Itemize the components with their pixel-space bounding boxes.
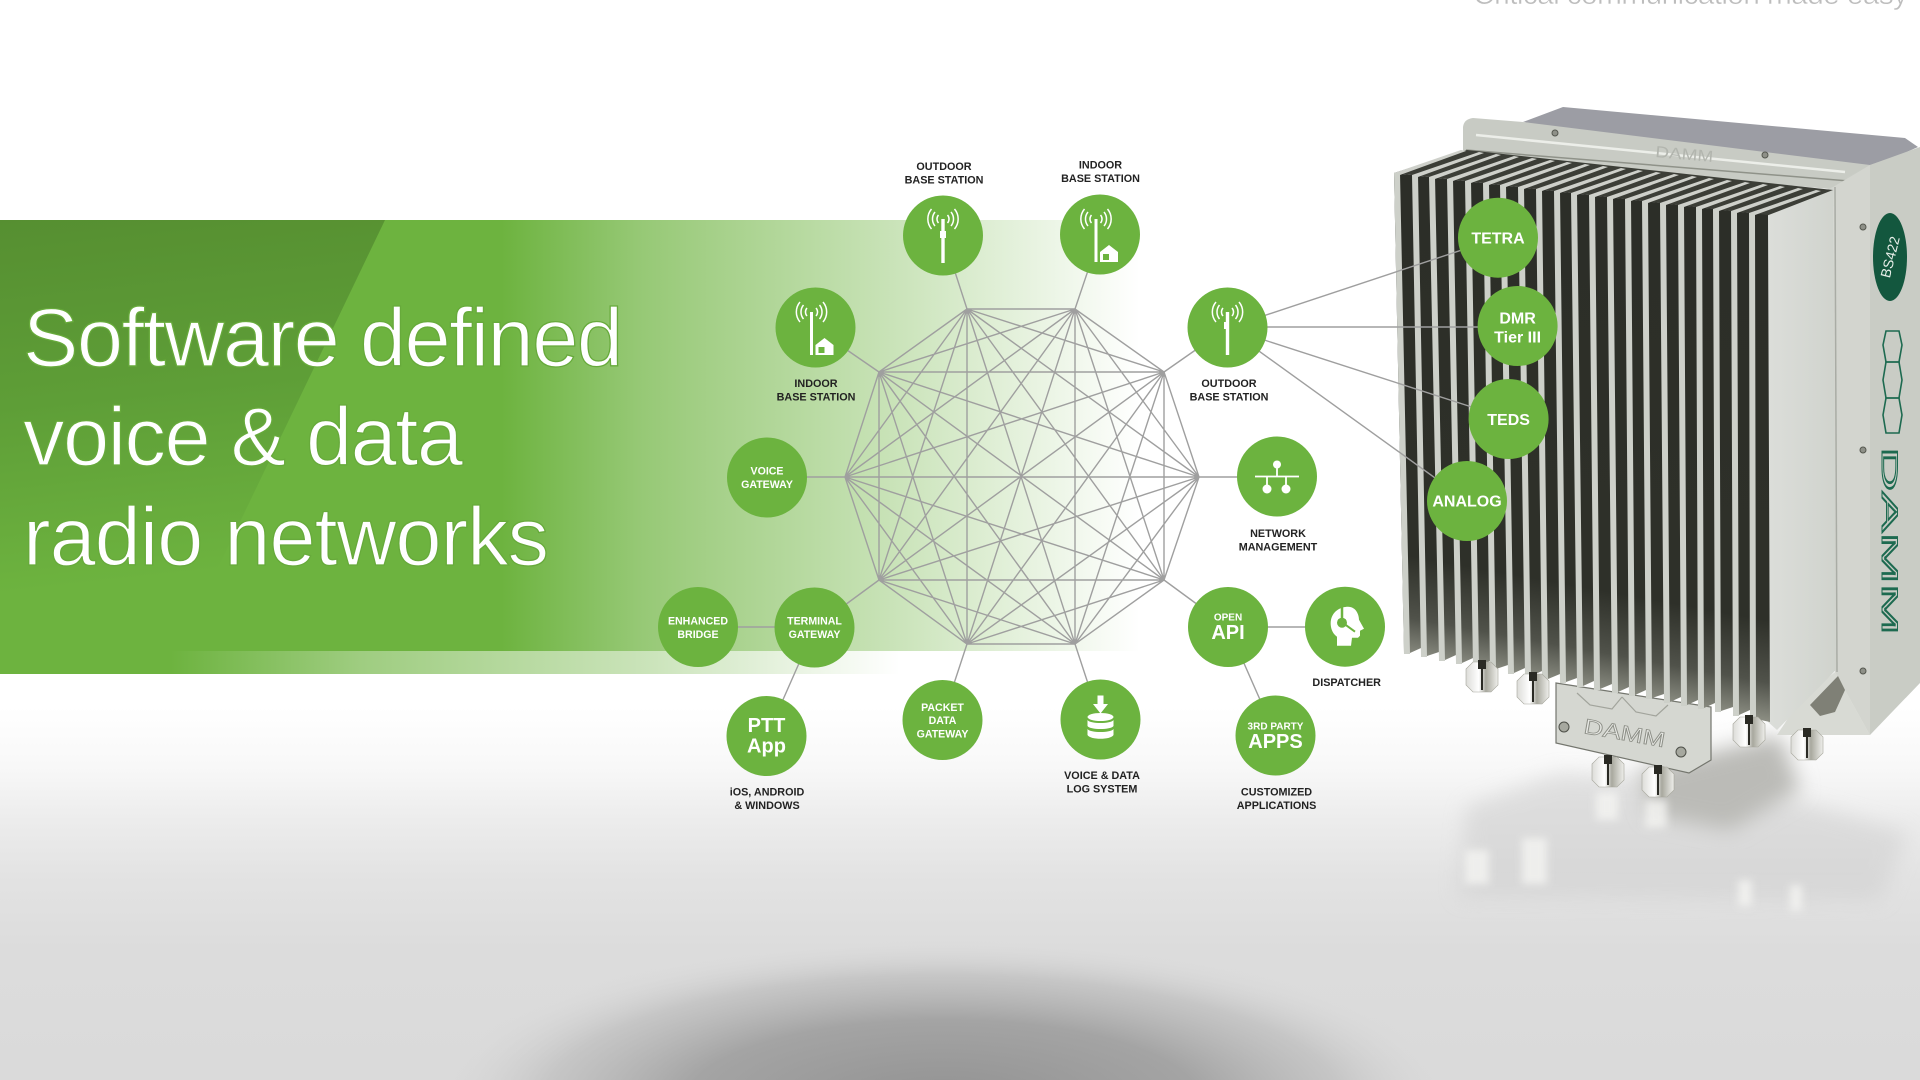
node: packet data gateway [902,680,982,760]
label: BASE STATION [1190,392,1269,404]
node: dispatcher [1305,587,1385,689]
icon: antenna with house [796,302,834,355]
node: outdoor base station right [1188,288,1269,404]
connector cover plate [1556,683,1711,773]
node: enhanced bridge: BRIDGE [677,629,719,641]
side screws [1860,224,1866,674]
node: enhanced bridge [658,587,738,667]
antenna connector lever [1810,676,1845,716]
icon: antenna with house [1081,209,1118,262]
label: INDOOR [794,378,838,390]
node: voice and data log system [1060,680,1140,796]
protocol: teds: TEDS [1487,412,1530,429]
protocol: dmr tier iii: DMR [1499,311,1536,328]
icon: headset operator [1331,607,1364,646]
title: voice & data [23,390,464,483]
title: Software defined [23,291,623,384]
engraved flange logo: DAMM [1655,144,1714,166]
protocol: tetra: TETRA [1471,230,1525,248]
label: & WINDOWS [734,800,800,812]
node: open api: API [1211,622,1245,644]
node: outdoor base station top [903,161,984,276]
protocol: analog [1427,461,1507,541]
node: packet data gateway: DATA [929,715,957,727]
model badge: BS422 [1877,234,1903,279]
node: open api [1188,587,1268,667]
node: voice gateway: GATEWAY [741,479,793,491]
label: NETWORK [1250,528,1306,540]
node: ptt app: PTT [748,715,785,737]
label: INDOOR [1079,160,1122,172]
label: OUTDOOR [1201,378,1257,390]
node: ptt app [726,696,806,812]
node: open api: OPEN [1214,613,1242,624]
model badge [1873,213,1907,301]
node: packet data gateway: PACKET [921,702,964,714]
connector cover plate: DAMM [1582,715,1667,752]
icon: antenna [928,209,958,263]
node: ptt app: App [747,736,786,758]
right side panel [1835,148,1920,735]
label: BASE STATION [1061,173,1140,185]
label: MANAGEMENT [1239,542,1318,554]
label: iOS, ANDROID [730,787,804,799]
icon: network tree [1255,460,1299,494]
protocol: dmr tier iii [1478,286,1558,366]
connector lines [698,235,1518,736]
radio base station device [1394,107,1920,797]
cover screws [1552,130,1768,158]
node: indoor base station left [776,288,856,404]
side logo: DAMM [1877,447,1902,635]
icon: antenna [1212,302,1243,355]
node: packet data gateway: GATEWAY [917,729,968,741]
protocol: dmr tier iii: Tier III [1494,330,1541,346]
mesh network [845,309,1199,644]
node: third party apps: 3RD PARTY [1248,721,1304,732]
label: VOICE & DATA [1064,770,1140,782]
title: radio networks [23,490,549,583]
node: indoor base station top [1060,160,1140,274]
floor shadow [430,935,1460,1080]
green banner [0,220,1140,674]
label: APPLICATIONS [1237,800,1316,812]
label: LOG SYSTEM [1067,784,1137,796]
node: voice gateway: VOICE [751,466,783,478]
icon: database with arrow [1088,696,1114,739]
side logo [1877,331,1902,635]
node: voice gateway [727,438,807,518]
label: BASE STATION [777,392,856,404]
top cover [1523,107,1918,178]
protocol: tetra [1458,198,1538,278]
cable connectors [1466,660,1823,797]
node: third party apps [1236,696,1316,812]
device reflection [1459,735,1908,911]
label: CUSTOMIZED [1241,787,1312,799]
inner side panel [1766,187,1836,730]
top flange [1463,118,1920,190]
label: DISPATCHER [1312,677,1381,689]
heat sink fins [1394,150,1833,722]
node: third party apps: APPS [1248,731,1303,753]
label: BASE STATION [905,174,984,186]
protocol: analog: ANALOG [1432,494,1502,510]
node: terminal gateway: TERMINAL [787,616,842,628]
protocol: teds [1469,379,1549,459]
node: network management [1237,436,1318,554]
label: OUTDOOR [916,161,972,173]
node: terminal gateway: GATEWAY [789,629,840,641]
node: terminal gateway [774,588,854,668]
title [23,291,623,583]
node: enhanced bridge: ENHANCED [668,616,728,628]
